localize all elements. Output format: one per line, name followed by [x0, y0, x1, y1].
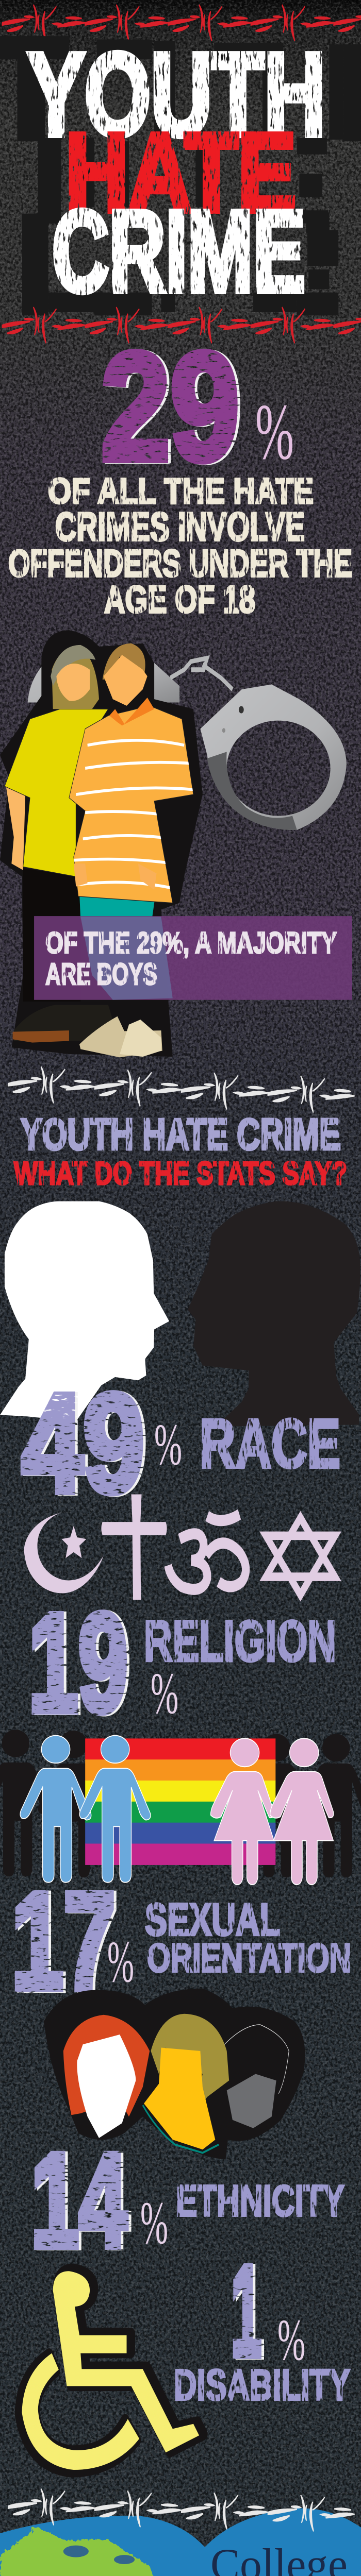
text: offenders under 18 — [8, 471, 352, 621]
title: youth hate crime — [28, 29, 325, 316]
stat: 49 percent race — [22, 1365, 340, 1521]
caption box — [34, 916, 352, 1000]
shadow figures — [0, 1730, 361, 1877]
text: offenders under 18: AGE OF 18 — [104, 578, 255, 621]
title: youth hate crime: HATE — [65, 110, 296, 234]
heading: what do the stats say — [14, 1110, 347, 1192]
caption: majority are boys — [45, 926, 337, 991]
barbed wire: above college — [8, 2488, 355, 2532]
stat: 1 percent disability — [174, 2239, 350, 2409]
stat: 19 percent religion — [28, 1584, 336, 1741]
stat: 14 percent ethnicity: 14 — [31, 2126, 127, 2275]
barbed wire: white section divider — [8, 1065, 355, 1114]
blue roof banner — [0, 2508, 361, 2576]
title block shadow — [0, 36, 361, 315]
crescent and star — [24, 1513, 104, 1593]
stat: 49 percent race: 49 — [22, 1365, 144, 1521]
red haired face — [63, 2015, 150, 2138]
stat: 49 percent race: % — [154, 1412, 182, 1477]
star of david — [266, 1518, 335, 1595]
stat: 19 percent religion: % — [151, 1660, 178, 1726]
stat: 17 percent sexual orientation: SEXUAL — [145, 1894, 280, 1945]
barbed wire: below title — [2, 307, 361, 343]
stat: 19 percent religion: 19 — [28, 1584, 128, 1741]
boy in yellow shirt — [5, 645, 108, 1002]
stat: 17 percent sexual orientation: 17 — [11, 1863, 116, 2018]
icon: religious symbols — [24, 1495, 335, 1600]
tree — [0, 2527, 168, 2576]
stat: 14 percent ethnicity: % — [140, 2189, 168, 2257]
illustration: college campus building and tree — [0, 2508, 361, 2576]
shadow behind boys — [0, 630, 203, 1057]
stat: 29 percent: % — [255, 387, 294, 476]
stat: 29 percent: 29 — [101, 321, 239, 493]
barbed wire: top red — [2, 5, 361, 41]
illustration: two boys and handcuffs — [0, 630, 352, 1057]
stat: 17 percent sexual orientation: % — [107, 1929, 134, 1994]
stat: 1 percent disability: 1 — [231, 2239, 261, 2383]
icon: wheelchair — [19, 2270, 203, 2471]
text: offenders under 18: OF ALL THE HATE — [48, 471, 314, 511]
stat: 14 percent ethnicity — [31, 2126, 344, 2275]
caption: majority are boys: ARE BOYS — [45, 957, 157, 991]
illustration: couples and rainbow flag — [0, 1730, 361, 1885]
illustration: three faces — [44, 1989, 305, 2159]
male couple — [20, 1736, 151, 1883]
cross — [101, 1495, 167, 1600]
stat: 1 percent disability: % — [277, 2307, 305, 2372]
om — [168, 1514, 246, 1589]
sneakers — [13, 1005, 162, 1057]
boy in striped orange shirt — [69, 643, 193, 919]
rainbow flag — [85, 1738, 275, 1865]
yellow face — [143, 2014, 229, 2153]
female couple — [210, 1738, 334, 1885]
gray face — [224, 2025, 289, 2128]
stat: 17 percent sexual orientation — [11, 1863, 351, 2018]
icon: handcuffs — [28, 649, 347, 830]
icon: white and black heads facing each other — [0, 1201, 360, 1427]
